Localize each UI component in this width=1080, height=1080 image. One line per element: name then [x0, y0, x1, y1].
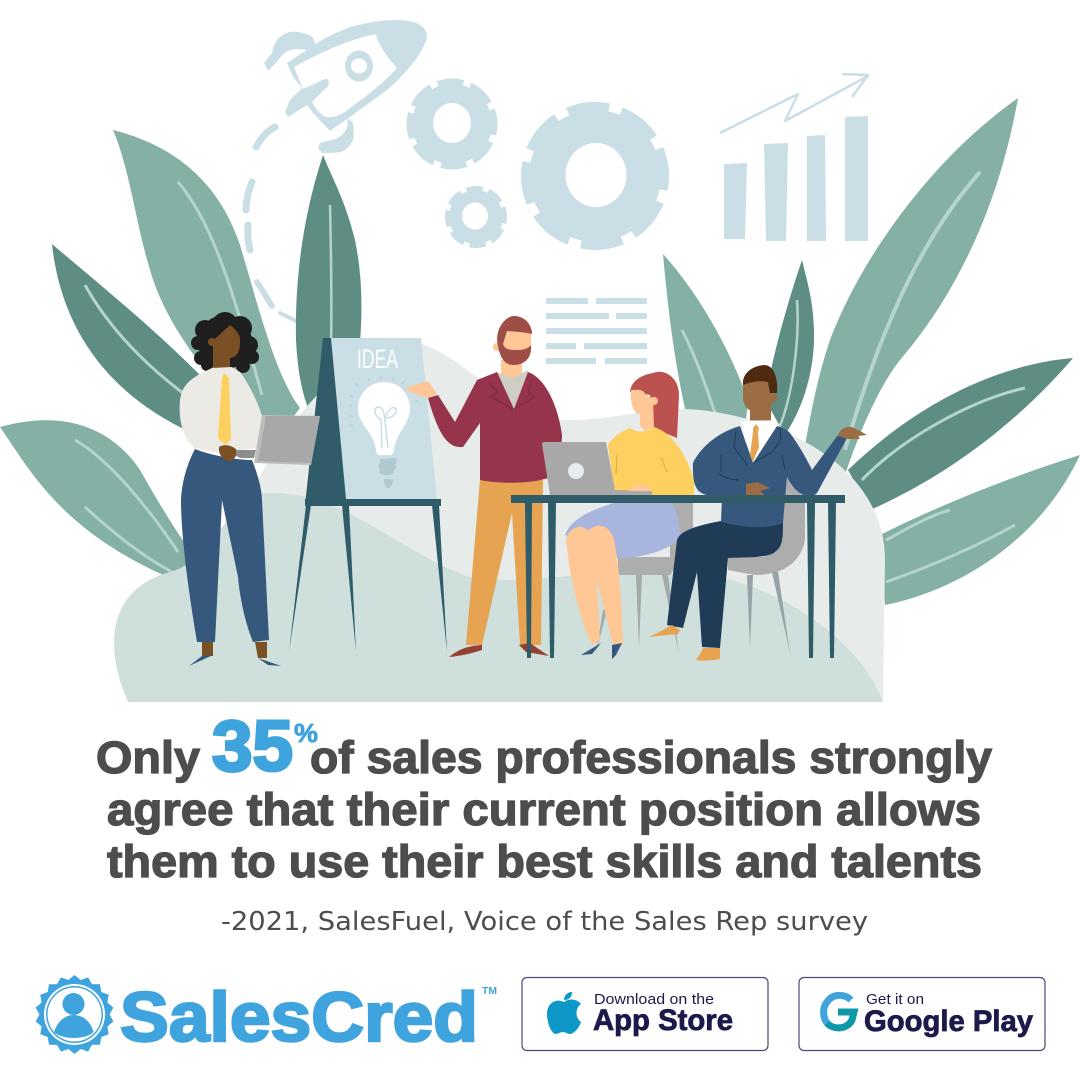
badge: Google Play: Google Play [864, 1005, 1033, 1038]
person: woman at desk [542, 372, 694, 659]
hand [219, 445, 236, 461]
legs [566, 526, 623, 645]
icon: gears [399, 71, 684, 265]
hand [407, 381, 437, 398]
person: bearded presenter [407, 316, 562, 657]
desk [511, 495, 845, 658]
badge: App Store [522, 978, 768, 1050]
statistic: 35 percent: % [294, 718, 318, 748]
shoes [649, 625, 720, 661]
neck and collar [501, 360, 522, 380]
source citation: -2021, SalesFuel, Voice of the Sales Rep survey [221, 907, 868, 937]
icon: Google G [824, 995, 854, 1028]
raised hand [838, 427, 867, 439]
background blob: pale green ground [114, 493, 883, 702]
chair [618, 495, 693, 575]
bar chart with rising arrow [720, 74, 868, 241]
orange trousers [466, 480, 543, 645]
leaf: bottom left [0, 420, 190, 578]
white shirt [180, 367, 264, 453]
headline: of sales professionals strongly [310, 732, 992, 783]
flip chart with idea bulb [289, 338, 447, 652]
text lines placeholder block [546, 298, 647, 364]
ankles and shoes [202, 642, 267, 658]
person: woman with laptop [180, 312, 320, 666]
face [631, 390, 654, 431]
headline: Only [96, 732, 200, 783]
leaf: right small light [663, 254, 748, 430]
badge: App Store: Download on the [594, 991, 714, 1008]
person: man in suit [649, 365, 867, 661]
neck and shirt [750, 400, 771, 422]
desk laptop [542, 442, 652, 495]
badge: Google Play [799, 978, 1045, 1050]
background blob: light grey [230, 343, 885, 700]
leaf: right dark [848, 358, 1073, 510]
chair [728, 477, 805, 575]
rocket dashed trail [246, 127, 296, 321]
headline: agree that their current position allows [107, 784, 981, 835]
orange tie [750, 424, 759, 462]
blue jacket [693, 426, 847, 527]
hair [743, 365, 777, 393]
wordmark: SalesCred [120, 978, 478, 1056]
face [503, 328, 531, 352]
icon: rocket [264, 20, 427, 153]
large gear [506, 87, 684, 265]
yellow top [608, 427, 694, 495]
leaf: left dark [52, 244, 200, 432]
leaf: centre tall [296, 155, 361, 430]
icon: apple [547, 992, 581, 1034]
hand [630, 484, 650, 491]
medium gear [399, 71, 505, 177]
hair and beard [497, 316, 532, 365]
background leaves [0, 98, 1080, 605]
leaf: right small dark [765, 260, 814, 435]
hair [191, 312, 259, 373]
trousers [667, 521, 783, 648]
hair back [630, 372, 679, 438]
small gear [440, 181, 512, 253]
yellow tie [218, 373, 231, 445]
chart word: IDEA [357, 344, 398, 374]
lightbulb [349, 376, 418, 488]
shoes [449, 643, 549, 657]
statistic: 35 percent: 35 [212, 708, 293, 786]
leaf: big right [805, 98, 1018, 475]
trousers [181, 449, 269, 642]
trademark: TM [482, 986, 497, 997]
leaf: top left [113, 130, 300, 445]
face [743, 380, 772, 411]
headline: them to use their best skills and talents [107, 836, 982, 887]
neck and face [213, 325, 240, 370]
laptop [226, 450, 256, 458]
burgundy sweater [428, 372, 562, 483]
skirt [565, 503, 680, 558]
leaf: lower right [880, 455, 1080, 605]
logo: SalesCred [29, 969, 497, 1060]
blue heels [581, 643, 622, 659]
badge: Google Play: Get it on [866, 991, 924, 1008]
badge: App Store: App Store [593, 1004, 733, 1037]
headline [96, 708, 992, 887]
icon: badge [29, 969, 120, 1060]
hand on chest [746, 482, 770, 495]
